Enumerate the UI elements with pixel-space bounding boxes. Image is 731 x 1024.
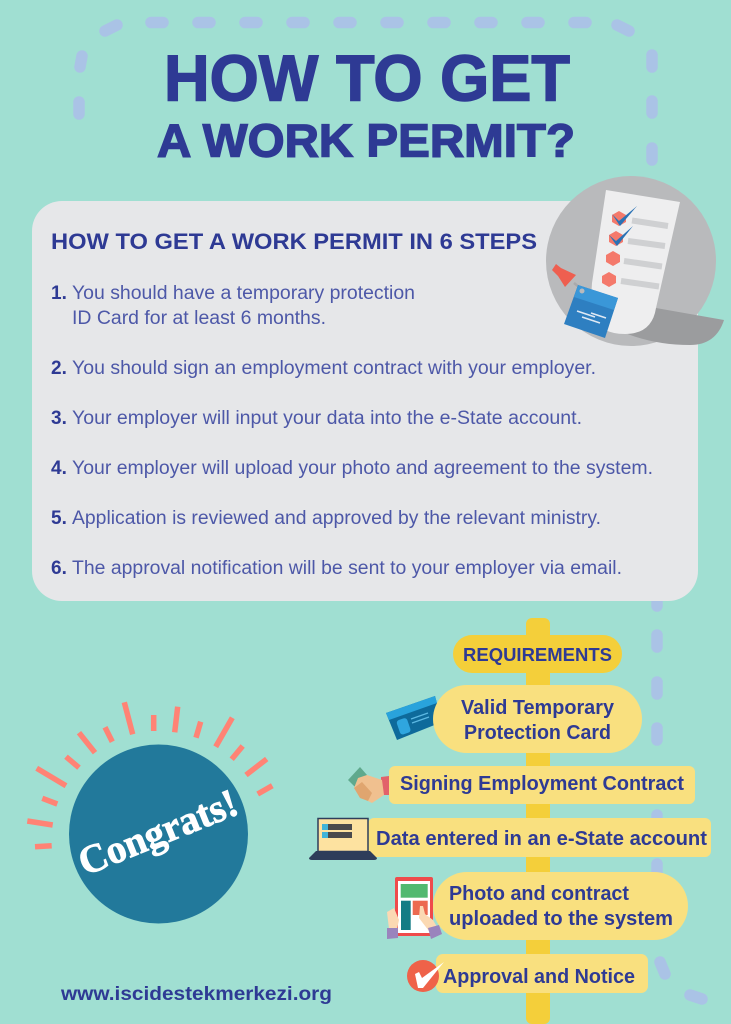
step 1: 1. [51,283,67,304]
title: A WORK PERMIT? [157,114,575,166]
step 1: You should have a temporary protection [72,283,415,304]
requirement: upload: uploaded to the system [449,908,673,930]
sun rays [27,702,272,847]
step 2: You should sign an employment contract with your employer. [72,358,596,379]
step 5: Application is reviewed and approved by the relevant ministry. [72,508,601,529]
step 1 [51,283,415,329]
requirement: card [433,685,642,753]
congrats badge [27,702,272,924]
pole [526,618,550,1024]
step 5: 5. [51,508,67,529]
step 4: 4. [51,458,67,479]
requirement: card: Protection Card [464,722,611,744]
icon: id card [386,696,442,740]
icon: laptop [309,818,377,860]
requirement: upload: Photo and contract [449,883,629,905]
title [157,42,575,166]
website url: www.iscidestekmerkezi.org [60,984,332,1005]
requirement: card: Valid Temporary [461,697,615,719]
step 2: 2. [51,358,67,379]
step 3: Your employer will input your data into the e-State account. [72,408,582,429]
step 3: 3. [51,408,67,429]
step 4: Your employer will upload your photo and agreement to the system. [72,458,653,479]
step 1: ID Card for at least 6 months. [72,308,326,329]
requirement: contract [389,766,695,804]
requirements heading: REQUIREMENTS [463,645,612,665]
requirement: approval [436,954,648,993]
requirement: upload [433,872,688,940]
requirement: approval: Approval and Notice [443,966,635,988]
congrats badge: Congrats! [72,780,244,884]
title: HOW TO GET [164,42,570,114]
icon: approval check [407,960,444,992]
requirement: data entry [368,818,711,857]
panel: six steps [32,201,698,601]
icon: checklist document with pin [546,176,724,346]
signpost [309,618,711,1024]
icon: tablet with hands [387,877,442,939]
requirement: contract: Signing Employment Contract [400,773,684,795]
requirement: data entry: Data entered in an e-State account [376,828,707,850]
step 6: The approval notification will be sent to your employer via email. [72,558,622,579]
icon: handshake [348,767,389,803]
panel heading: HOW TO GET A WORK PERMIT IN 6 STEPS [51,229,537,254]
requirements heading [453,635,622,673]
step 6: 6. [51,558,67,579]
